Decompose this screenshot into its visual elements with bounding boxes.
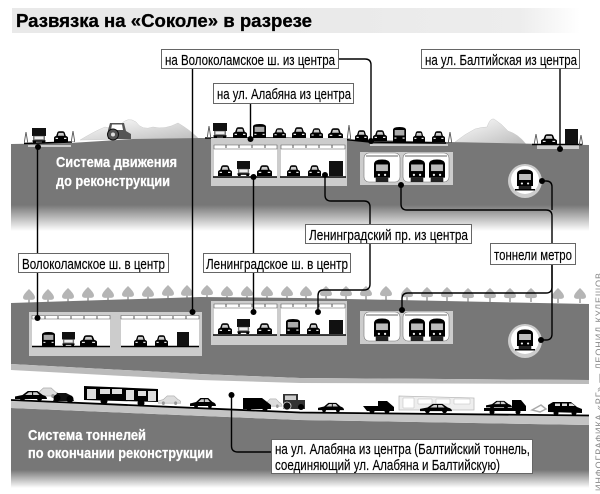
leader lines <box>38 59 560 452</box>
heading: before reconstruction: Система движения <box>56 154 177 171</box>
hills right <box>455 119 526 144</box>
label: Baltic tunnel: соединяющий ул. Алабяна и Балтийскую) <box>275 457 500 474</box>
heading: before reconstruction <box>56 154 177 190</box>
label: Baltic tunnel <box>272 440 532 474</box>
label: Alabyan from centre: на ул. Алабяна из центра <box>217 86 351 103</box>
panel: before reconstruction <box>11 119 589 231</box>
trees row <box>23 285 586 304</box>
heading: after reconstruction: по окончании реконструкции <box>28 445 213 462</box>
strip under middle panel <box>11 364 589 384</box>
label: Volokolamskoye from centre: на Волоколамское ш. из центра <box>165 52 335 69</box>
label: Leningradsky from centre: Ленинградский пр. из центра <box>309 227 469 244</box>
label: Volokolamskoye from centre <box>162 50 338 69</box>
heading: after reconstruction: Система тоннелей <box>28 427 146 444</box>
connector dots <box>34 136 563 398</box>
ground <box>11 138 589 205</box>
title band <box>12 8 580 33</box>
title band: Развязка на «Соколе» в разрезе <box>16 11 312 31</box>
label: Baltic tunnel: на ул. Алабяна из центра (Балтийский тоннель, <box>275 441 530 458</box>
metro block top <box>360 152 453 185</box>
label: metro tunnels: тоннели метро <box>494 247 572 264</box>
label: Volokolamskoye to centre: Волоколамское ш. в центр <box>22 256 165 273</box>
metro circle top <box>508 164 542 198</box>
vehicles: surface before reconstruction <box>24 123 583 145</box>
label: Alabyan from centre <box>214 84 354 104</box>
metro block middle <box>360 311 453 344</box>
heading: before reconstruction: до реконструкции <box>56 173 170 190</box>
road surface strips <box>28 144 579 149</box>
tunnel block: Leningradskoye <box>211 301 347 345</box>
panel: after reconstruction <box>11 401 589 488</box>
label: Leningradskoye to centre: Ленинградское ш. в центр <box>206 256 348 273</box>
tunnel block: Volokolamskoye <box>29 312 202 356</box>
hills left <box>80 120 198 140</box>
fade <box>11 205 589 231</box>
label: metro tunnels <box>490 244 576 264</box>
label: Volokolamskoye to centre <box>18 254 168 273</box>
panel: middle ground <box>11 297 589 380</box>
vehicles: bottom road <box>11 386 589 416</box>
heading: after reconstruction <box>28 427 213 462</box>
tractor <box>108 123 131 140</box>
metro circle middle <box>508 324 542 358</box>
road lines <box>24 138 582 144</box>
tunnel block: Alabyan top <box>211 138 347 186</box>
